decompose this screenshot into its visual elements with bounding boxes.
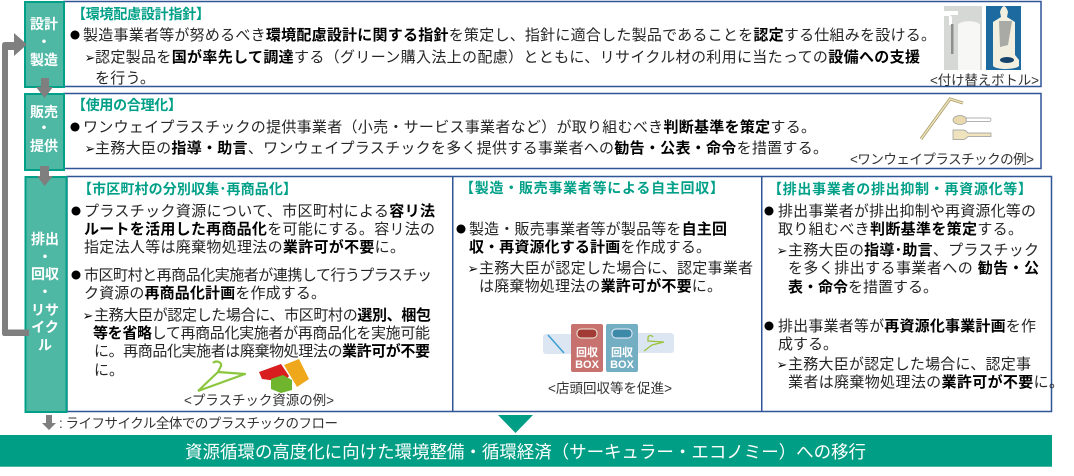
text: guideline bullet: ● <box>70 27 80 42</box>
text: emitter sub-bullet two: ➢ <box>777 358 788 373</box>
text: guidance sub-bullet: ➢ <box>85 142 96 157</box>
text: municipal bullet one <box>71 202 435 256</box>
text: emitter bullet two: 排出事業者等が再資源化事業計画を作 <box>778 317 1036 335</box>
text: municipal bullet one: ルートを活用した再商品化を可能にする。容リ法の <box>84 221 435 238</box>
stage label: recycling: ・ <box>38 249 52 265</box>
text: legend label: : ライフサイクル全体でのプラスチックのフロー <box>59 416 338 431</box>
text: emitter sub-bullet one <box>777 241 1039 296</box>
text: one-way plastic bullet: ● <box>70 119 80 134</box>
text: emitter bullet one: 排出事業者が排出抑制や再資源化等の <box>778 202 1036 220</box>
icon: collection boxes: 回収 <box>576 346 598 359</box>
text: municipal sub-bullet: 主務大臣が認定した場合に、市区町村の選別、梱包 <box>94 306 431 324</box>
text: municipal sub-bullet: に。再商品化実施者は廃棄物処理法の業許可が不要 <box>94 342 430 360</box>
stage label: sales: ・ <box>37 120 51 136</box>
icon: collection boxes: 回収 <box>611 346 633 359</box>
text: municipal sub-bullet: 等を省略して再商品化実施者が再商品化を実施可能 <box>93 324 430 342</box>
stage label: design: ・ <box>37 34 51 50</box>
text: voluntary bullet <box>456 220 727 256</box>
stage label: recycling: リサ <box>31 302 59 318</box>
text: procurement sub-bullet <box>85 48 920 87</box>
icon: straw and cutlery <box>921 99 991 140</box>
stage label: design: 設計 <box>30 16 58 32</box>
text: municipal sub-bullet: ➢ <box>83 309 94 324</box>
text: municipal bullet one: プラスチック資源について、市区町村による容リ法 <box>84 202 435 220</box>
text: procurement sub-bullet: を行う。 <box>95 70 155 87</box>
text: guideline bullet: 製造事業者等が努めるべき環境配慮設計に関する指針を策定し、指針に適合した製品であることを認定する仕組みを設ける。 <box>83 26 936 44</box>
legend: flow arrow <box>42 415 338 431</box>
text: emitter bullet two <box>764 317 1036 353</box>
text: emitter bullet two: ● <box>764 318 774 333</box>
panel: design and manufacturing <box>25 2 1041 88</box>
icon: legend arrow <box>42 415 56 430</box>
caption: one-way plastic: <ワンウェイプラスチックの例> <box>850 152 1034 167</box>
text: emitter sub-bullet two <box>777 356 1064 391</box>
arrow: design to sales <box>36 78 53 98</box>
text: municipal bullet one: 指定法人等は廃棄物処理法の業許可が不要に。 <box>84 238 405 256</box>
heading: rational use: 【使用の合理化】 <box>72 97 182 113</box>
text: emitter sub-bullet two: 主務大臣が認定した場合に、認定事 <box>788 356 1031 373</box>
text: guidance sub-bullet: 主務大臣の指導・助言、ワンウェイプラスチックを多く提供する事業者への勧告・公表・命令を措置する。 <box>95 139 828 157</box>
text: banner statement: 資源循環の高度化に向けた環境整備・循環経済（サーキュラー・エコノミー）への移行 <box>185 442 866 462</box>
caption: refill bottles: <付け替えボトル> <box>930 73 1039 88</box>
stage label: recycling: ・ <box>38 284 52 300</box>
stage label: recycling <box>26 177 66 412</box>
stage label: design <box>25 2 64 87</box>
panel: sales and provision <box>25 94 1041 170</box>
icon: toy blocks <box>259 359 309 393</box>
text: emitter sub-bullet two: 業者は廃棄物処理法の業許可が不要に。 <box>788 373 1064 391</box>
heading: municipal collection: 【市区町村の分別収集･再商品化】 <box>78 181 297 197</box>
text: voluntary sub-bullet <box>468 260 753 295</box>
stage label: sales <box>25 94 64 170</box>
caption: in-store collection: <店頭回収等を促進> <box>548 380 672 396</box>
text: municipal sub-bullet: に。 <box>94 362 124 379</box>
text: emitter sub-bullet one: を多く排出する事業者への 勧告・公 <box>788 259 1039 277</box>
text: voluntary bullet: 製造・販売事業者等が製品等を自主回 <box>469 220 727 238</box>
icon: collection boxes: BOX <box>575 359 600 371</box>
stage label: recycling: 回収 <box>31 266 59 282</box>
text: emitter sub-bullet one: 主務大臣の指導･助言、プラスチック <box>788 241 1039 259</box>
heading: design guideline: 【環境配慮設計指針】 <box>72 6 210 22</box>
text: emitter sub-bullet one: ➢ <box>777 244 788 259</box>
text: procurement sub-bullet: ➢ <box>85 51 96 66</box>
icon: hanger <box>198 362 245 391</box>
text: municipal bullet one: ● <box>71 203 81 218</box>
text: municipal bullet two: ク資源の再商品化計画を作成する。 <box>84 285 326 302</box>
panel: disposal, collection, recycling <box>26 176 1064 412</box>
icon: refill bottles <box>944 6 1021 70</box>
text: procurement sub-bullet: 認定製品を国が率先して調達する（グリーン購入法上の配慮）とともに、リサイクル材の利用に当たっての設備への支援 <box>95 48 920 66</box>
icon: collection boxes <box>543 324 674 372</box>
text: one-way plastic bullet: ワンウェイプラスチックの提供事業者（小売・サービス事業者など）が取り組むべき判断基準を策定する。 <box>83 118 816 136</box>
text: emitter bullet two: 成する。 <box>778 336 838 353</box>
text: municipal bullet two <box>71 267 432 302</box>
column: business emitters <box>761 177 1064 411</box>
column: municipal collection <box>71 181 435 408</box>
icon: collection boxes: BOX <box>610 359 635 371</box>
heading: voluntary collection: 【製造・販売事業者等による自主回収】 <box>460 180 724 196</box>
stage label: recycling: 排出 <box>31 231 59 247</box>
stage label: sales: 販売 <box>30 104 58 120</box>
text: voluntary bullet: ● <box>456 221 466 236</box>
text: emitter bullet one <box>764 202 1036 238</box>
text: municipal sub-bullet <box>83 306 431 379</box>
arrow: lifecycle feedback loop <box>2 33 29 336</box>
text: municipal bullet two: ● <box>71 267 81 282</box>
stage label: design: 製造 <box>30 52 58 68</box>
caption: plastic resources: <プラスチック資源の例> <box>184 393 334 408</box>
stage label: sales: 提供 <box>30 138 58 154</box>
arrow: sales to recycling <box>37 166 53 186</box>
arrow: down to banner <box>498 415 533 433</box>
text: voluntary sub-bullet: ➢ <box>468 262 479 277</box>
column: voluntary collection <box>452 177 753 411</box>
text: municipal bullet two: 市区町村と再商品化実施者が連携して行うプラスチッ <box>84 267 432 284</box>
heading: business emitters: 【排出事業者の排出抑制・再資源化等】 <box>768 181 1032 197</box>
text: voluntary sub-bullet: は廃棄物処理法の業許可が不要に。 <box>479 277 722 295</box>
text: emitter bullet one: ● <box>764 203 774 218</box>
text: voluntary bullet: 収・再資源化する計画を作成する。 <box>469 238 711 256</box>
text: emitter sub-bullet one: 表・命令を措置する。 <box>788 278 938 296</box>
text: emitter bullet one: 取り組むべき判断基準を策定する。 <box>778 220 1023 238</box>
stage label: recycling: イク <box>31 319 59 335</box>
banner: transition to circular economy <box>0 435 1052 467</box>
text: voluntary sub-bullet: 主務大臣が認定した場合に、認定事業者 <box>479 260 753 277</box>
stage label: recycling: ル <box>38 337 52 353</box>
